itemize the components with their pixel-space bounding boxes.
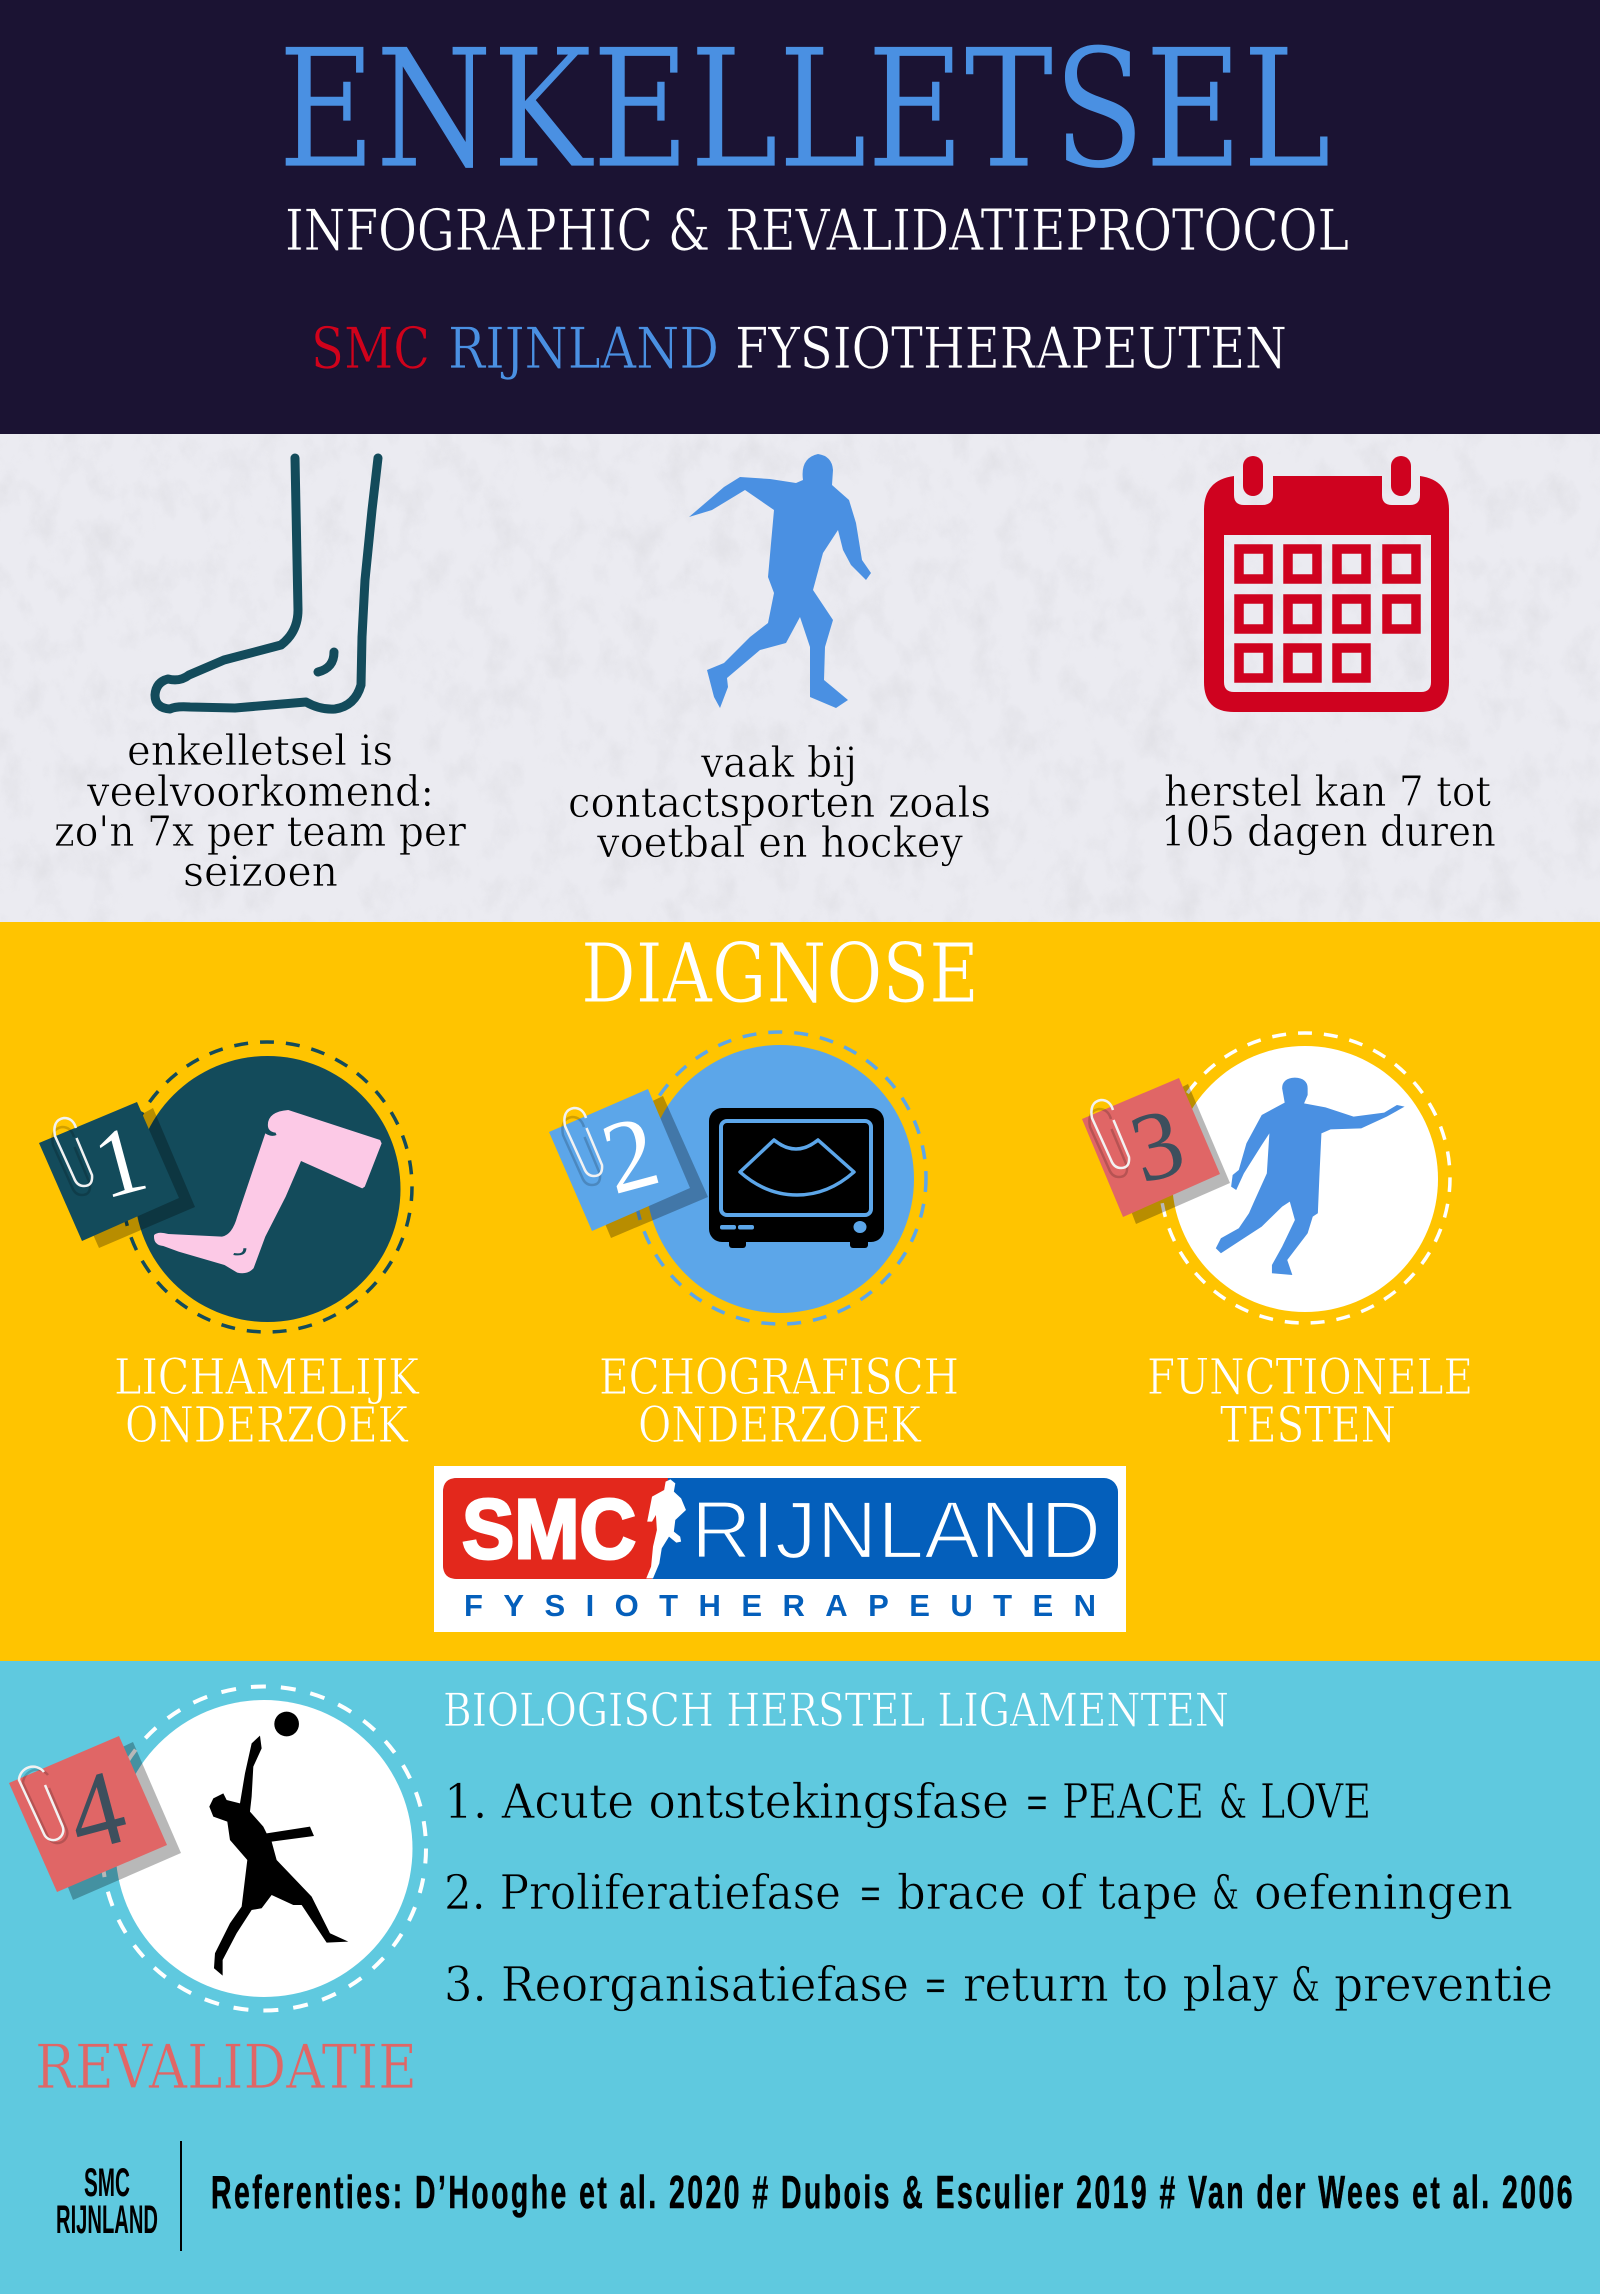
step 2: ultrasound	[549, 1032, 959, 1454]
label: physical exam: ONDERZOEK	[125, 1396, 409, 1454]
label: ultrasound exam: ECHOGRAFISCH	[599, 1348, 959, 1406]
list: recovery phases: 2. Proliferatiefase	[444, 1865, 841, 1921]
list: recovery phases: preventie	[1334, 1957, 1553, 2013]
list: recovery phases: PEACE	[1062, 1774, 1204, 1830]
list: recovery phases: brace of tape	[897, 1865, 1198, 1921]
footer brand	[56, 2161, 158, 2242]
label: functional tests: FUNCTIONELE	[1147, 1348, 1473, 1406]
logo: SMC Rijnland	[434, 1466, 1126, 1632]
step 4: rehabilitation circle	[9, 1686, 426, 2010]
title: ENKELLETSEL	[278, 14, 1331, 205]
panel: revalidatie	[0, 1661, 1600, 2294]
label: ultrasound exam: ONDERZOEK	[638, 1396, 922, 1454]
note 2: 2	[591, 1093, 670, 1217]
list: recovery phases: =	[924, 1957, 947, 2013]
icon: balancing player	[1216, 1078, 1405, 1275]
label: physical exam	[114, 1348, 420, 1454]
note 1	[39, 1102, 195, 1248]
list: recovery phases: &	[1219, 1774, 1247, 1830]
text: frequency: zo'n 7x per team per	[54, 807, 467, 856]
label: functional tests	[1147, 1348, 1473, 1454]
label: physical exam: LICHAMELIJK	[114, 1348, 420, 1406]
logo: SMC Rijnland: SMC	[462, 1482, 636, 1576]
note 4: 4	[55, 1747, 138, 1876]
icon: ultrasound monitor	[709, 1108, 884, 1248]
text: recovery time: herstel kan 7 tot	[1164, 767, 1491, 816]
list: recovery phases: =	[1025, 1774, 1049, 1830]
icon: pink leg	[154, 1110, 382, 1273]
brand line	[311, 316, 1287, 382]
brand line: RIJNLAND	[448, 316, 719, 382]
list: recovery phases: &	[1212, 1865, 1239, 1921]
heading: diagnose: DIAGNOSE	[581, 927, 979, 1022]
footer brand: RIJNLAND	[56, 2198, 158, 2242]
text: recovery time: 105 dagen duren	[1161, 807, 1496, 856]
logo: SMC Rijnland: FYSIOTHERAPEUTEN	[464, 1588, 1096, 1623]
list: recovery phases	[444, 1774, 1553, 2013]
text: recovery time	[1161, 767, 1496, 856]
list: recovery phases: return to play	[963, 1957, 1278, 2013]
step 1: physical exam	[39, 1042, 420, 1454]
text: frequency: enkelletsel is	[127, 726, 393, 775]
brand line: FYSIOTHERAPEUTEN	[735, 316, 1287, 382]
heading: revalidatie: REVALIDATIE	[35, 2032, 417, 2103]
icon: calendar	[1204, 456, 1449, 712]
text: frequency: veelvoorkomend:	[86, 767, 434, 816]
heading: biological recovery: BIOLOGISCH HERSTEL LIGAMENTEN	[443, 1683, 1229, 1737]
panel: diagnose	[0, 922, 1600, 1661]
list: recovery phases: 3. Reorganisatiefase	[444, 1957, 909, 2013]
list: recovery phases: =	[859, 1865, 882, 1921]
brand line: SMC	[311, 316, 430, 382]
note 3	[1082, 1078, 1230, 1224]
text: contact sports: voetbal en hockey	[596, 818, 963, 867]
panel: facts	[0, 434, 1600, 922]
icon: running player	[689, 454, 871, 708]
list: recovery phases: oefeningen	[1254, 1865, 1513, 1921]
panel: header	[0, 0, 1600, 434]
text: frequency: seizoen	[183, 847, 338, 896]
label: functional tests: TESTEN	[1220, 1396, 1396, 1454]
text: contact sports: vaak bij	[700, 738, 857, 787]
subtitle: INFOGRAPHIC & REVALIDATIEPROTOCOL	[285, 198, 1349, 264]
text: contact sports	[568, 738, 991, 867]
icon: foot outline	[155, 458, 378, 709]
list: recovery phases: &	[1291, 1957, 1320, 2013]
note 2	[549, 1089, 708, 1238]
logo: SMC Rijnland: RIJNLAND	[691, 1485, 1101, 1576]
note 3: 3	[1120, 1087, 1195, 1204]
note 4	[9, 1736, 181, 1900]
icon: volleyball player	[209, 1712, 348, 1976]
note 1: 1	[83, 1104, 157, 1219]
text: frequency	[54, 726, 467, 896]
list: recovery phases: 1. Acute ontstekingsfase	[444, 1774, 1009, 1830]
text: contact sports: contactsporten zoals	[568, 778, 991, 827]
list: recovery phases: LOVE	[1260, 1774, 1371, 1830]
footer brand: SMC	[84, 2161, 130, 2205]
step 3: functional tests	[1082, 1033, 1473, 1454]
label: ultrasound exam	[599, 1348, 959, 1454]
